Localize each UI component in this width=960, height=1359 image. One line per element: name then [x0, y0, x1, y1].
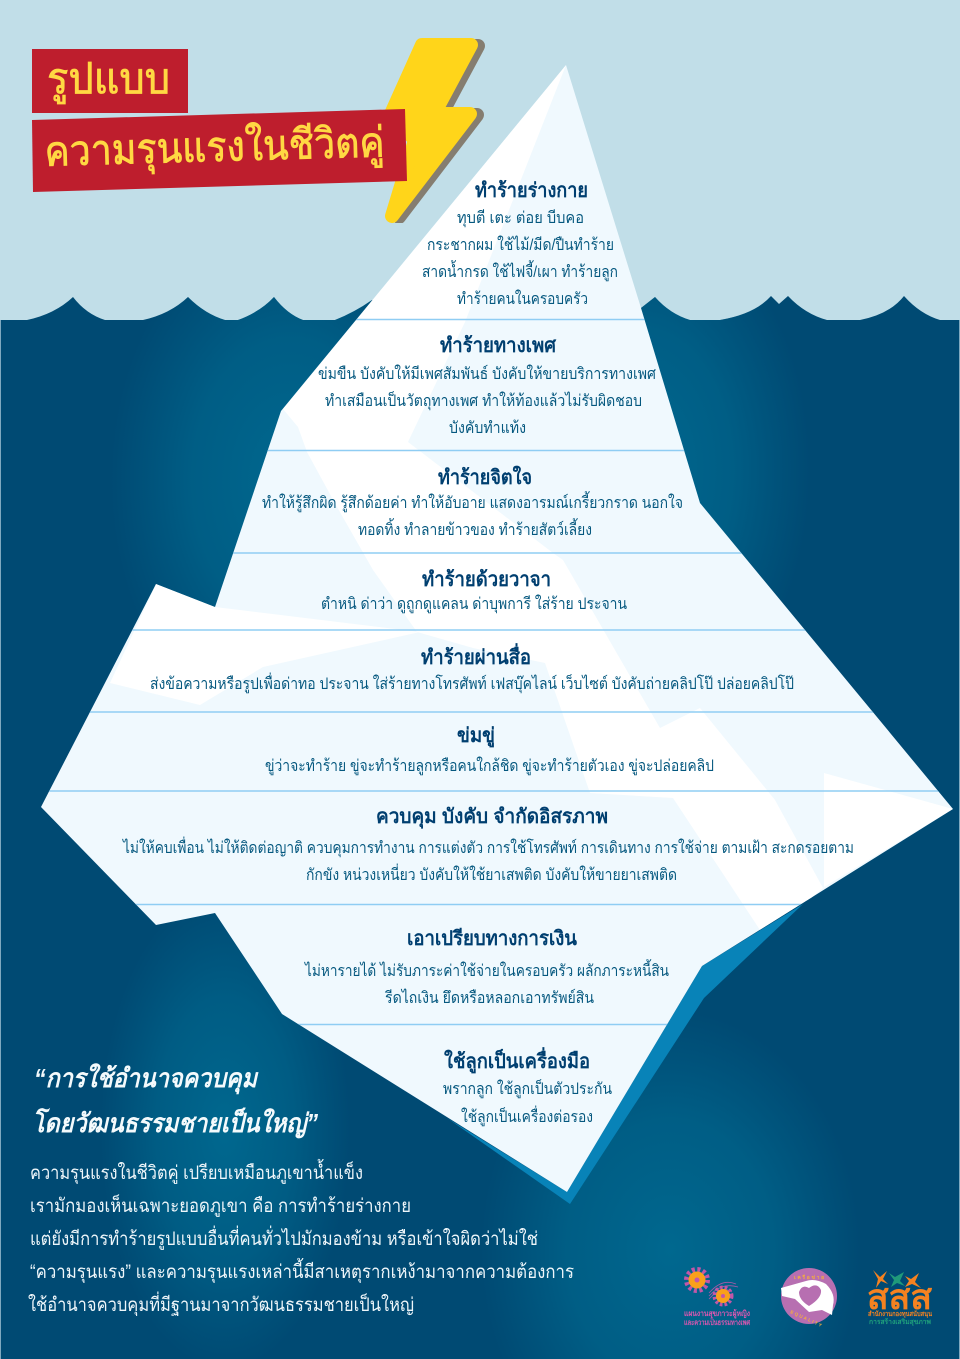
section: verbal: ทำร้ายด้วยวาจา — [422, 568, 551, 591]
description text: “ความรุนแรง” และความรุนแรงเหล่านี้มีสาเหตุรากเหง้ามาจากความต้องการ — [30, 1258, 574, 1284]
section: financial: เอาเปรียบทางการเงิน — [407, 927, 577, 950]
description text: ใช้อำนาจควบคุมที่มีฐานมาจากวัฒนธรรมชายเป็นใหญ่ — [28, 1291, 414, 1317]
icon: lightning bolt — [391, 45, 478, 217]
section: psychological: ทำให้รู้สึกผิด รู้สึกด้อยค่า ทำให้อับอาย แสดงอารมณ์เกรี้ยวกราด นอกใจ — [262, 491, 683, 513]
description text — [28, 1159, 574, 1317]
section: physical: ทำร้ายคนในครอบครัว — [457, 289, 588, 308]
section: psychological: ทอดทิ้ง ทำลายข้าวของ ทำร้ายสัตว์เลี้ยง — [358, 518, 592, 539]
section: children: ใช้ลูกเป็นเครื่องต่อรอง — [461, 1105, 593, 1127]
section: psychological: ทำร้ายจิตใจ — [438, 465, 532, 489]
logo: ThaiHealth: การสร้างเสริมสุขภาพ — [869, 1317, 931, 1326]
section: physical: สาดน้ำกรด ใช้ไฟจี้/เผา ทำร้ายลูก — [422, 260, 618, 282]
section: sexual: ทำเสมือนเป็นวัตถุทางเพศ ทำให้ท้องแล้วไม่รับผิดชอบ — [325, 390, 642, 411]
section: control: กักขัง หน่วงเหนี่ยว บังคับให้ใช้ยาเสพติด บังคับให้ขายยาเสพติด — [306, 863, 677, 884]
logo: women's health programme: แผนงานสุขภาวะผู้หญิง — [684, 1308, 750, 1319]
title banner: top — [32, 49, 188, 113]
section: physical: กระชากผม ใช้ไม้/มีด/ปืนทำร้าย — [427, 235, 614, 254]
section: children: ใช้ลูกเป็นเครื่องมือ — [444, 1046, 590, 1075]
section: sexual — [318, 334, 656, 437]
title banner: top: รูปแบบ — [47, 55, 170, 104]
logo: ThaiHealth: สำนักงานกองทุนสนับสนุน — [868, 1310, 932, 1318]
description text: แต่ยังมีการทำร้ายรูปแบบอื่นที่คนทั่วไปมักมองข้าม หรือเข้าใจผิดว่าไม่ใช่ — [30, 1225, 538, 1250]
section: financial: ไม่หารายได้ ไม่รับภาระค่าใช้จ่ายในครอบครัว ผลักภาระหนี้สิน — [303, 959, 669, 980]
title banner: bottom — [32, 109, 407, 192]
section: threats: ขู่ว่าจะทำร้าย ขู่จะทำร้ายลูกหรือคนใกล้ชิด ขู่จะทำร้ายตัวเอง ขู่จะปล่อยคลิป — [265, 756, 714, 776]
section: psychological — [262, 465, 683, 539]
description text: เรามักมองเห็นเฉพาะยอดภูเขา คือ การทำร้ายร่างกาย — [30, 1193, 411, 1217]
iceberg shadow facet — [447, 904, 803, 1204]
section: verbal: ตำหนิ ด่าว่า ดูถูกดูแคลน ด่าบุพการี ใส่ร้าย ประจาน — [321, 594, 627, 614]
section: sexual: บังคับทำแท้ง — [449, 419, 526, 437]
section: financial — [303, 927, 669, 1007]
section: control — [121, 806, 854, 884]
section: physical: ทำร้ายร่างกาย — [475, 179, 588, 202]
logo: ThaiHealth — [867, 1270, 933, 1326]
sea with waves — [0, 280, 960, 1359]
section: sexual: ข่มขืน บังคับให้มีเพศสัมพันธ์ บังคับให้ขายบริการทางเพศ — [318, 364, 656, 383]
quote heading: โดยวัฒนธรรมชายเป็นใหญ่” — [32, 1107, 318, 1139]
section: sexual: ทำร้ายทางเพศ — [440, 334, 557, 357]
section: threats: ข่มขู่ — [457, 725, 495, 749]
section: physical — [422, 179, 618, 308]
section: media — [150, 642, 794, 694]
section: verbal — [321, 568, 627, 614]
quote heading: “การใช้อำนาจควบคุม — [34, 1063, 259, 1095]
logo: women's health programme: และความเป็นธรรมทางเพศ — [684, 1316, 751, 1327]
title banner: bottom: ความรุนแรงในชีวิตคู่ — [44, 119, 385, 178]
section: children — [443, 1046, 612, 1127]
logo: hands heart — [781, 1268, 837, 1328]
section: financial: รีดไถเงิน ยึดหรือหลอกเอาทรัพย์สิน — [385, 988, 594, 1007]
section: media: ทำร้ายผ่านสื่อ — [421, 642, 531, 669]
frame edges — [0, 320, 960, 1359]
section: control: ควบคุม บังคับ จำกัดอิสรภาพ — [376, 806, 608, 829]
logo: ThaiHealth: สสส — [867, 1278, 933, 1317]
quote heading — [32, 1063, 318, 1139]
logo: women's health programme — [684, 1270, 751, 1327]
section: media: ส่งข้อความหรือรูปเพื่อด่าทอ ประจาน ใส่ร้ายทางโทรศัพท์ เฟสบุ๊คไลน์ เว็บไซต์ บังคับถ่ายคลิปโป๊ ปล่อยคลิปโป๊ — [150, 672, 794, 694]
sky background — [0, 0, 960, 340]
section: control: ไม่ให้คบเพื่อน ไม่ให้ติดต่อญาติ ควบคุมการทำงาน การแต่งตัว การใช้โทรศัพท์ การเดินทาง การใช้จ่าย ตามเฝ้า สะกดรอยตาม — [121, 836, 854, 858]
section: children: พรากลูก ใช้ลูกเป็นตัวประกัน — [443, 1078, 612, 1099]
logo: hands heart: EQUALITY — [790, 1309, 823, 1328]
section: physical: ทุบตี เตะ ต่อย บีบคอ — [457, 209, 584, 228]
logo: hands heart: เครือข่าย — [794, 1274, 824, 1281]
description text: ความรุนแรงในชีวิตคู่ เปรียบเหมือนภูเขาน้ำแข็ง — [30, 1159, 363, 1185]
section: threats — [265, 725, 714, 776]
